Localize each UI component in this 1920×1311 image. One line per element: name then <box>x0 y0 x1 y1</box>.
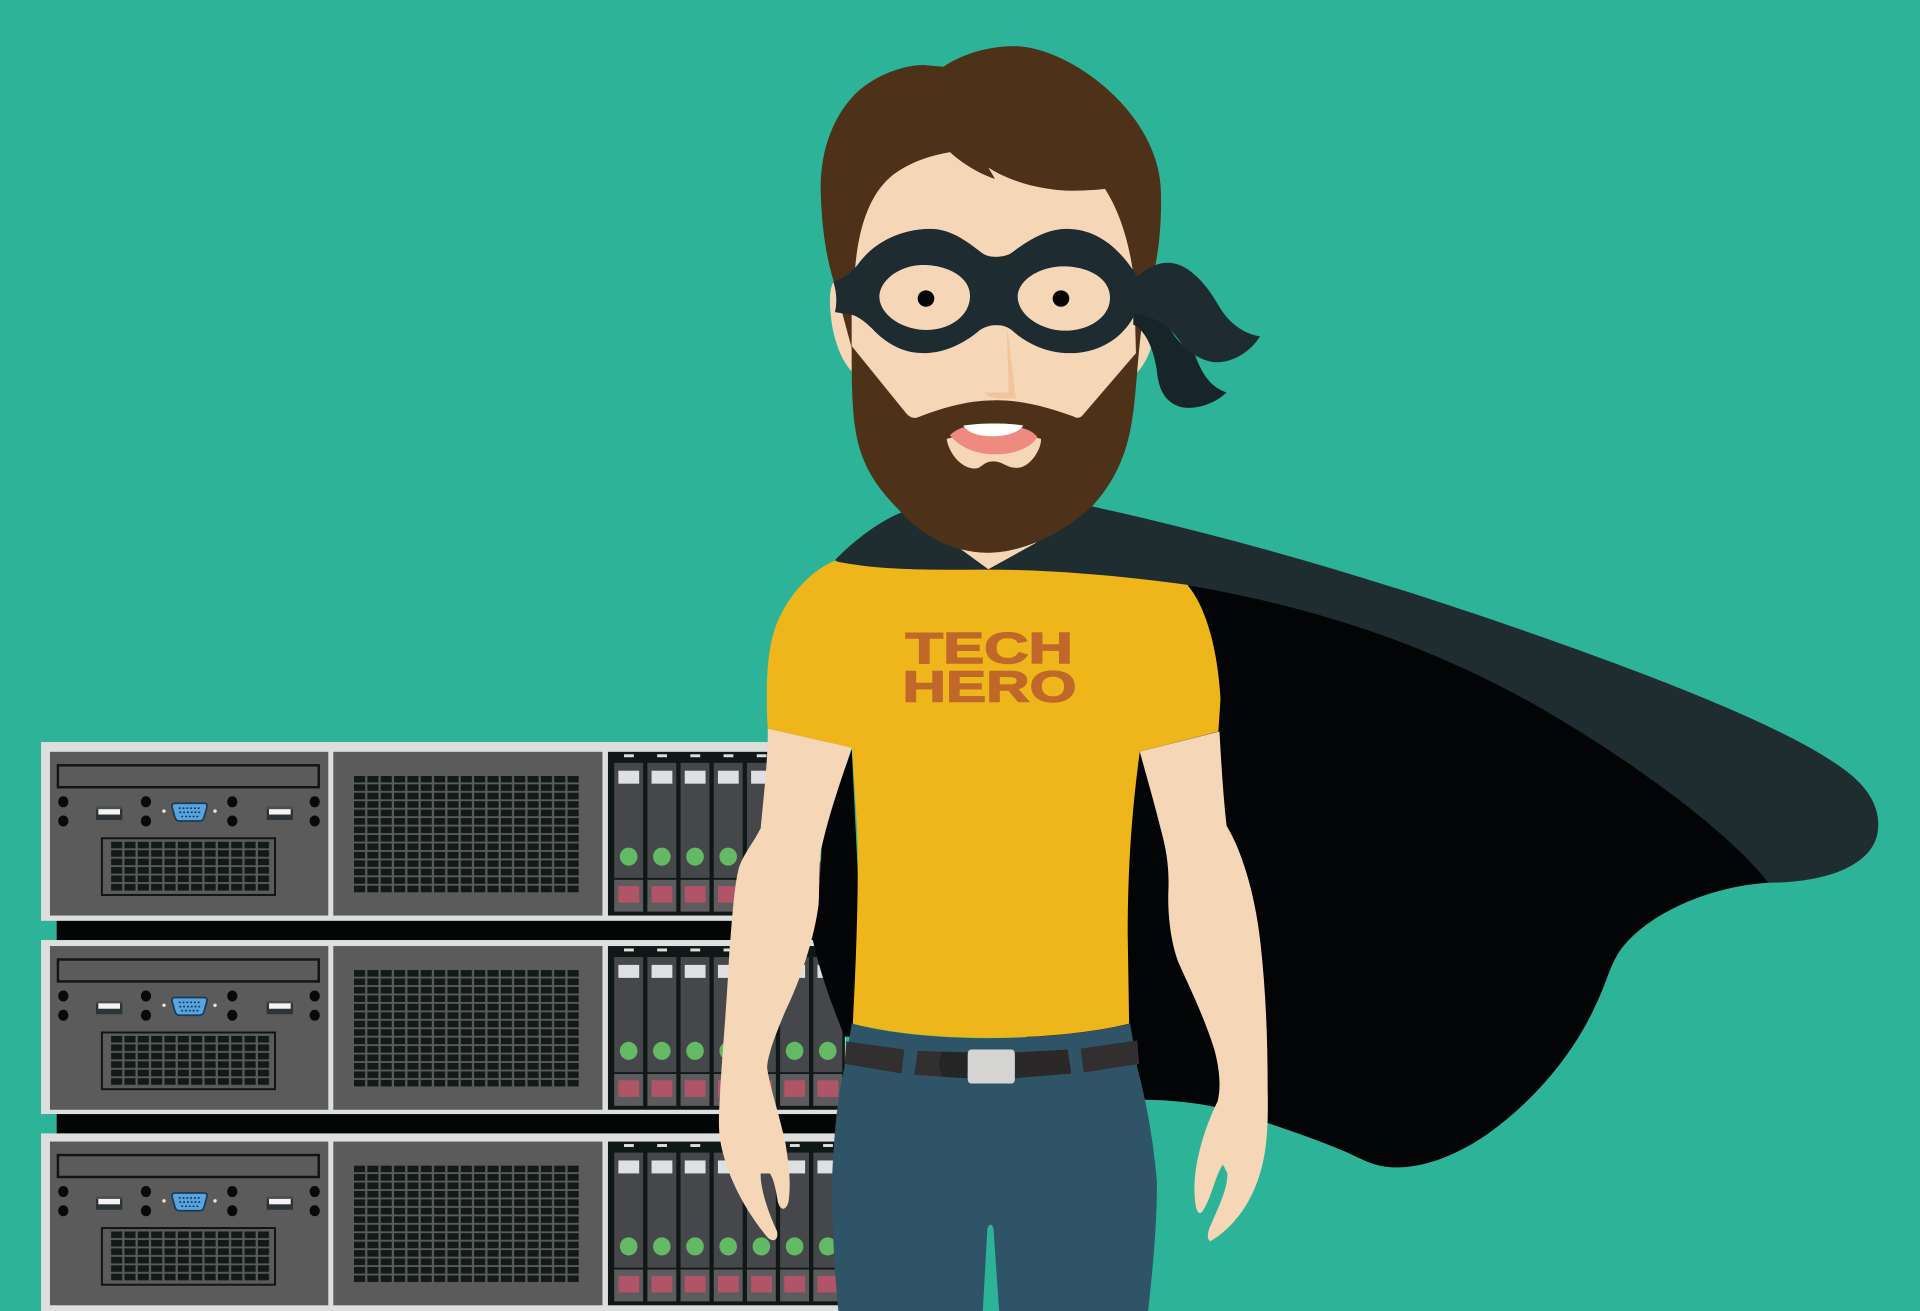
TECH: TECH <box>906 624 1073 673</box>
vga port <box>162 997 217 1015</box>
hair <box>821 46 1161 351</box>
screw dots <box>58 1186 320 1216</box>
middle panel with vent <box>333 752 602 916</box>
belt <box>845 1040 1139 1084</box>
drive bay <box>608 1142 845 1305</box>
usb ports <box>96 1197 293 1210</box>
left panel <box>50 752 328 916</box>
neck <box>947 539 1037 569</box>
small vent <box>102 1228 275 1285</box>
server unit 3 <box>41 1133 846 1311</box>
left panel <box>50 1142 328 1305</box>
left arm <box>719 729 852 1240</box>
server unit 1 <box>41 742 846 921</box>
usb ports <box>96 807 293 820</box>
usb ports <box>96 1001 293 1014</box>
small vent <box>102 838 275 895</box>
beard <box>852 316 1142 553</box>
cape <box>835 506 1878 1167</box>
drive slot <box>58 1155 319 1177</box>
cape section behind left arm <box>812 749 859 1037</box>
eye mask <box>833 229 1138 353</box>
belt buckle <box>968 1050 1015 1084</box>
frame <box>41 1133 846 1311</box>
left ear <box>830 280 860 372</box>
frame <box>41 940 846 1114</box>
server rack <box>41 742 846 1311</box>
cape black inner layer <box>1026 586 1768 1167</box>
middle panel with vent <box>333 946 602 1110</box>
head <box>821 46 1260 569</box>
screw dots <box>58 990 320 1021</box>
torso and arms <box>719 561 1268 1311</box>
mask tie main strand <box>1133 263 1260 362</box>
vga port <box>162 1193 217 1211</box>
pants <box>832 1024 1157 1311</box>
left eye <box>879 265 970 330</box>
cape outer dark layer <box>835 506 1878 883</box>
mouth lip <box>950 425 1037 454</box>
drive slot <box>58 960 319 981</box>
teeth <box>963 424 1023 436</box>
mask tie dark strand <box>1133 314 1227 408</box>
right ear <box>1133 323 1153 375</box>
server unit 2 <box>41 940 846 1114</box>
right eye <box>1018 266 1110 331</box>
drive slot <box>58 765 319 787</box>
small vent <box>102 1032 275 1089</box>
middle panel with vent <box>333 1142 602 1305</box>
black spacer bands <box>57 921 845 1134</box>
yellow t-shirt <box>767 561 1221 1038</box>
screw dots <box>58 796 320 827</box>
frame <box>41 742 846 921</box>
face <box>852 152 1136 418</box>
right arm <box>1140 731 1268 1241</box>
shirt logo text <box>902 624 1076 712</box>
nose <box>984 329 1016 399</box>
chin patch <box>947 426 1041 469</box>
vga port <box>162 803 217 821</box>
left panel <box>50 946 328 1110</box>
HERO: HERO <box>902 662 1076 712</box>
drive bay <box>608 752 845 916</box>
drive bay <box>608 946 845 1110</box>
